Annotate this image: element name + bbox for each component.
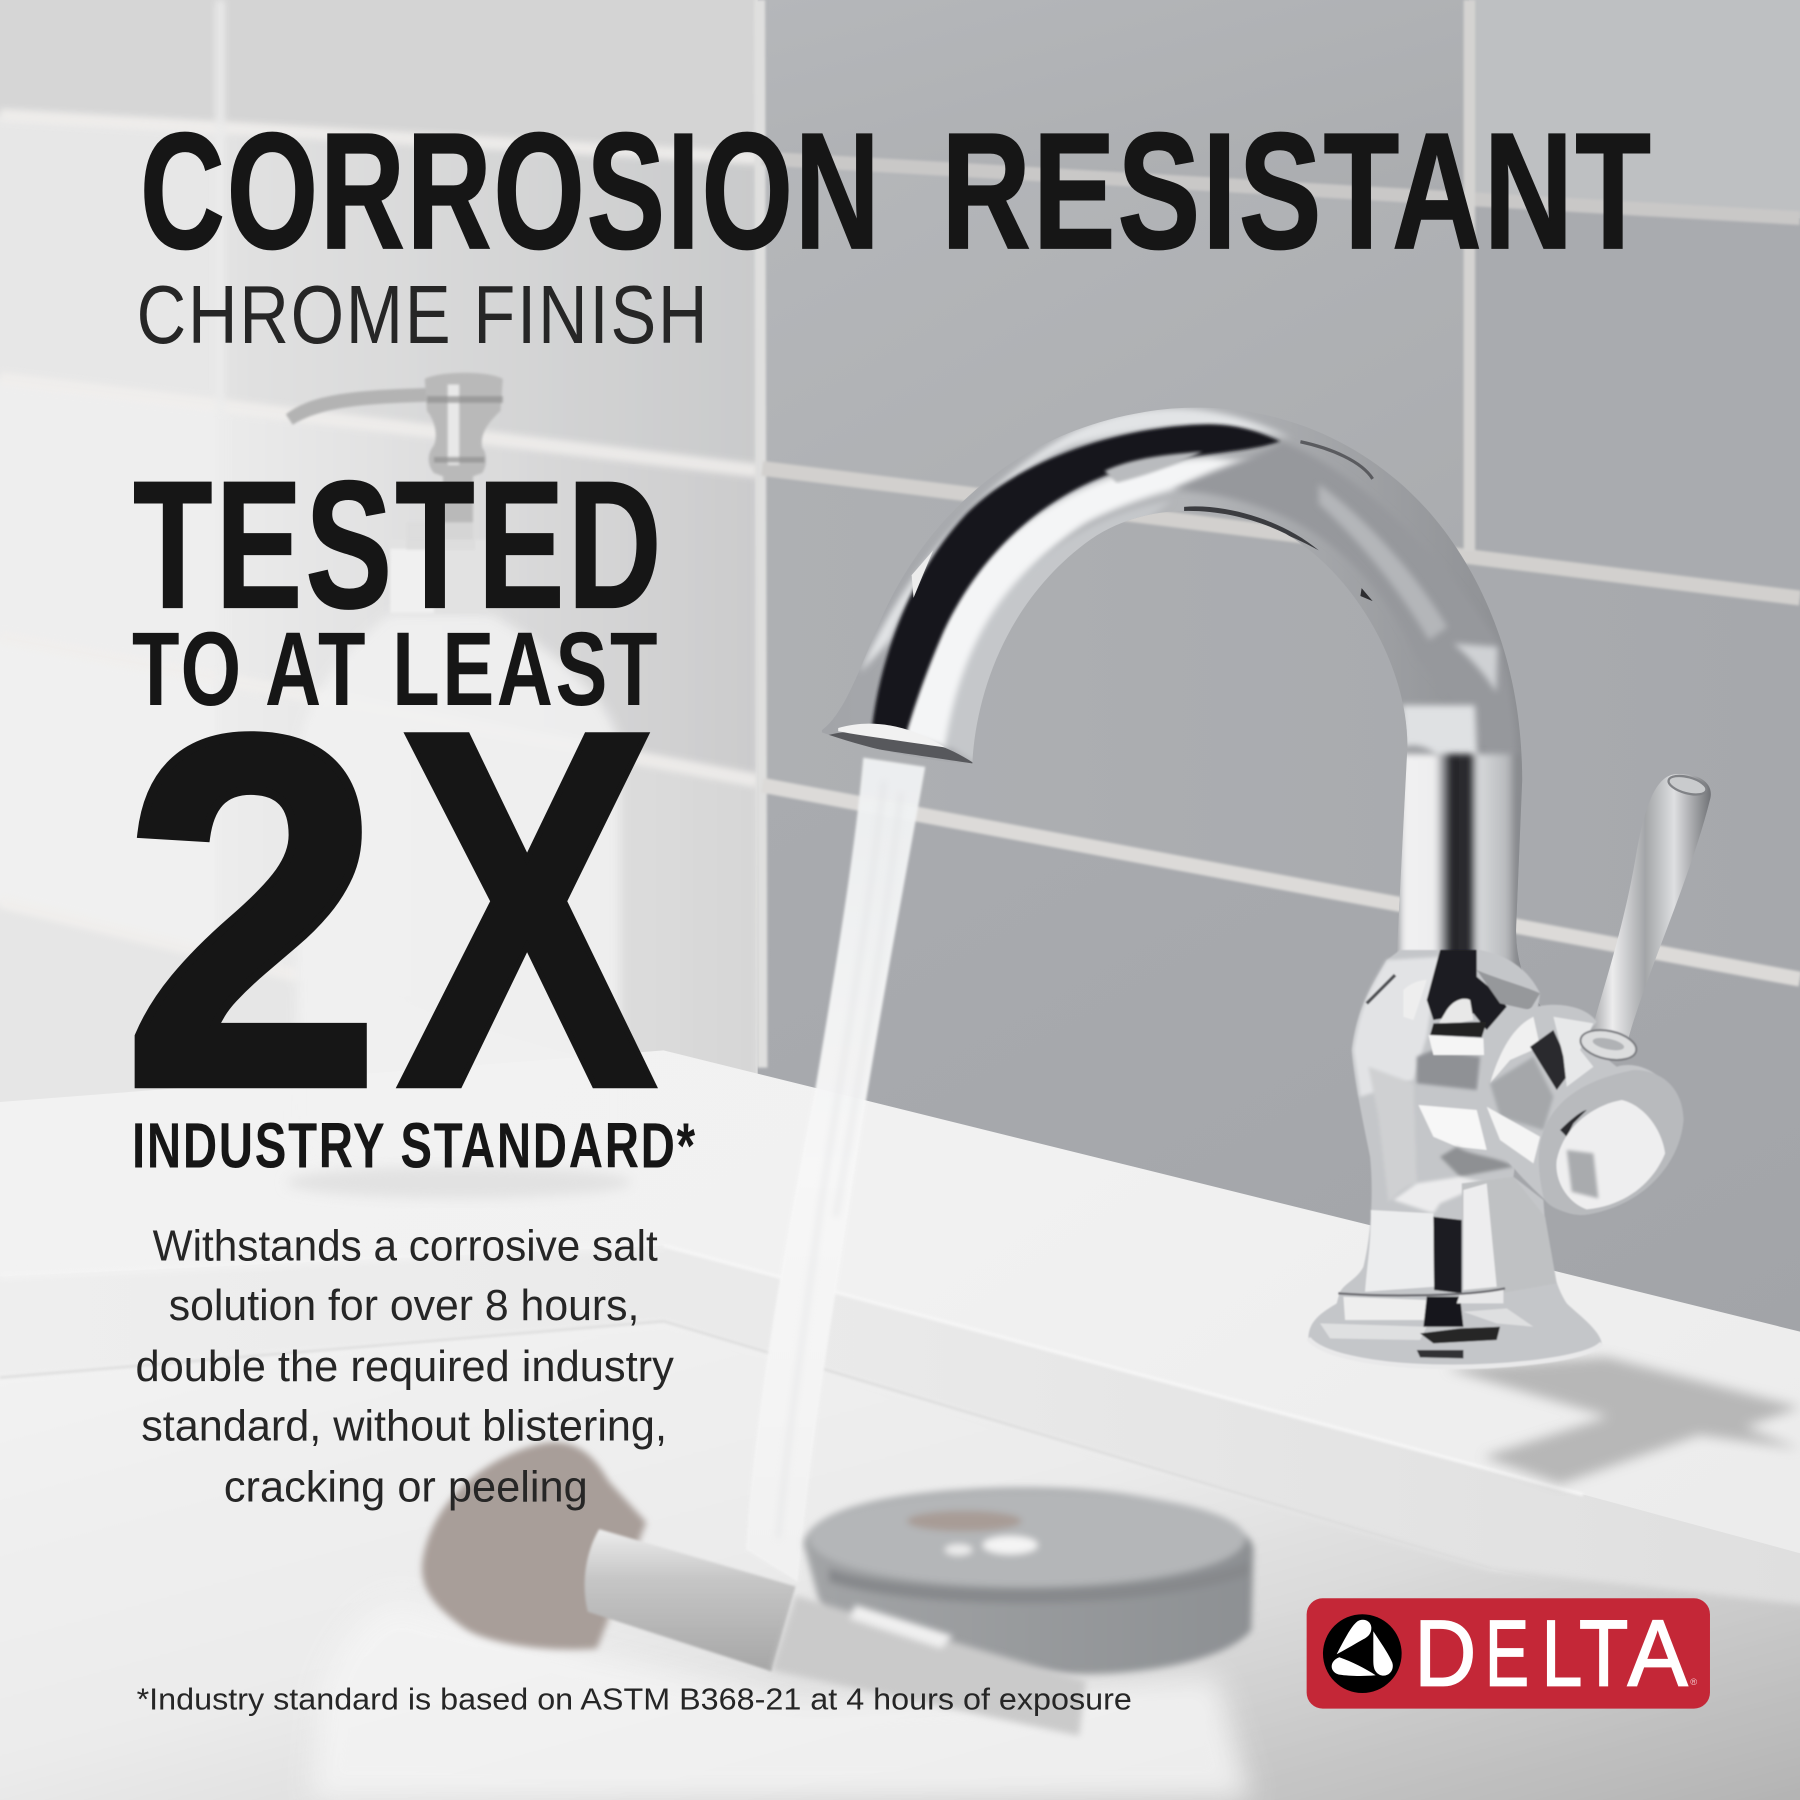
footnote: *Industry standard is based on ASTM B368-21 at 4 hours of exposure [137,1681,1132,1716]
logo wordmark [1414,1602,1688,1706]
handle cylinder and knob [1478,1005,1683,1215]
bottle [296,614,620,1178]
headline: 2X: 2 [123,633,381,1190]
basin and lower surface [0,1321,1800,1800]
faucet shadow on counter [1445,1357,1800,1484]
bristles [422,1442,646,1649]
headline: tested: TESTED [133,444,665,646]
title [140,99,1653,284]
neck [1365,1210,1434,1292]
handle [771,1596,1086,1736]
handle lever [1580,774,1711,1062]
towel [310,1600,1251,1800]
headline: 2X: X [397,626,659,1193]
logo wordmark: L [1542,1602,1582,1706]
flange [1343,1297,1427,1320]
headline: industry standard: INDUSTRY STANDARD* [132,1109,697,1181]
body text [135,1222,674,1512]
ferrule [585,1529,796,1671]
logo wordmark: D [1414,1602,1476,1706]
body text: standard, without blistering, [141,1403,667,1451]
title: CORROSION [140,99,882,284]
faucet [822,408,1711,1367]
body text: solution for over 8 hours, [169,1282,639,1330]
spout and stem [822,408,1544,1014]
logo badge [1307,1598,1710,1709]
headline: to at least: TO AT LEAST [132,611,660,728]
headline: 2X [123,626,659,1193]
soap dispenser [286,373,631,1198]
countertop [0,1050,1800,1800]
logo emblem [1323,1614,1402,1693]
body text: cracking or peeling [224,1464,588,1512]
Delta logo [1307,1598,1710,1709]
makeup brush [422,1442,1086,1736]
faucet body and base [1308,950,1602,1367]
body text: double the required industry [135,1343,674,1391]
logo wordmark: E [1485,1602,1529,1706]
logo wordmark: A [1628,1602,1688,1706]
tile grout lines [0,0,1800,1068]
counter front band [0,1246,1800,1630]
logo wordmark: T [1579,1602,1628,1706]
body text: Withstands a corrosive salt [153,1222,658,1270]
subtitle: CHROME FINISH [137,268,709,361]
registered mark: ® [1690,1677,1697,1687]
makeup tin [804,1488,1254,1674]
water stream [746,758,925,1582]
pump [286,373,503,613]
